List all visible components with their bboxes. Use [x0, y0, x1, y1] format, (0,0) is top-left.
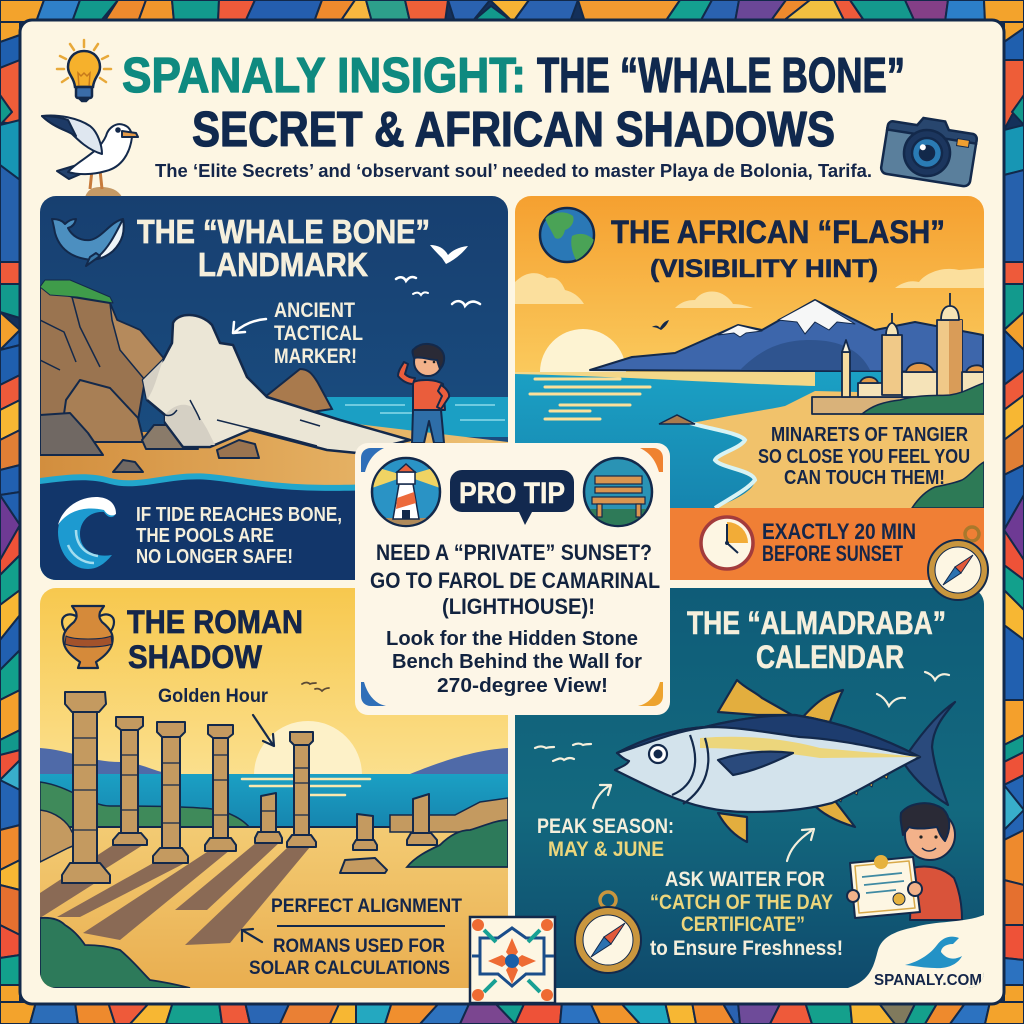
header — [42, 40, 979, 197]
distant hills — [40, 748, 508, 774]
text: peak season — [537, 815, 674, 861]
text: solar calculations: SOLAR CALCULATIONS — [249, 958, 450, 979]
text: perfect alignment: PERFECT ALIGNMENT — [271, 896, 462, 917]
column 2 — [113, 717, 147, 845]
sun — [254, 721, 362, 775]
text: tide warning: NO LONGER SAFE! — [136, 546, 293, 568]
columns — [62, 692, 437, 883]
panel: african flash — [515, 196, 984, 580]
small rock — [659, 415, 695, 424]
icon: camera — [880, 113, 979, 187]
icon: wave — [58, 497, 116, 569]
bone shading — [143, 360, 215, 445]
title: SPANALY INSIGHT: — [122, 49, 526, 103]
callout arrow: ancient marker — [233, 319, 266, 333]
small rock behind bone — [265, 369, 332, 415]
divider rule — [277, 925, 445, 927]
foam — [690, 423, 755, 508]
icon: greek vase — [62, 606, 114, 668]
sea — [515, 372, 984, 512]
sun reflection — [530, 379, 650, 419]
icon: lighthouse — [370, 458, 442, 530]
right bank ruins — [40, 798, 508, 862]
panel heading: roman shadow: SHADOW — [128, 639, 263, 675]
text: ask waiter: CERTIFICATE” — [681, 913, 805, 936]
icon: seagull — [42, 115, 138, 197]
panel heading: african flash: (VISIBILITY HINT) — [650, 255, 878, 283]
text: ask waiter: to Ensure Freshness! — [650, 937, 843, 960]
text: private sunset — [370, 540, 660, 619]
border: bottom strip — [0, 1002, 1024, 1024]
column 1 — [62, 692, 110, 883]
callout arrow: ask waiter — [787, 829, 814, 861]
tuna body — [615, 715, 920, 812]
text: 20 minutes — [762, 519, 916, 566]
column 3 — [153, 722, 188, 863]
text: minarets of tangier — [758, 424, 970, 489]
icon: large gull — [430, 245, 468, 264]
panel: roman shadow — [40, 588, 508, 988]
panel: almadraba calendar — [515, 588, 984, 989]
green headland — [40, 782, 250, 828]
border: right strip — [1004, 22, 1024, 1002]
text: 20 minutes: EXACTLY 20 MIN — [762, 519, 916, 544]
sun glitter — [242, 779, 370, 795]
text: peak season: PEAK SEASON: — [537, 815, 674, 838]
panel heading: almadraba: CALENDAR — [756, 639, 904, 675]
text: stone bench — [386, 627, 642, 697]
sand — [40, 827, 508, 988]
panel heading: whale bone: LANDMARK — [198, 246, 368, 283]
birds — [535, 672, 949, 761]
icon: globe — [540, 208, 594, 262]
pro tip badge — [450, 470, 574, 525]
pro tip badge: PRO TIP — [459, 477, 565, 510]
tangier city — [812, 293, 984, 414]
tuna eye — [649, 745, 667, 763]
text: minarets of tangier: CAN TOUCH THEM! — [784, 467, 945, 489]
text: tide warning: IF TIDE REACHES BONE, — [136, 504, 342, 526]
sun — [540, 329, 626, 372]
tuna finlets — [835, 725, 890, 802]
column shadows — [40, 842, 310, 945]
text: ancient tactical marker: MARKER! — [274, 345, 357, 368]
title: THE “WHALE BONE” — [537, 49, 905, 103]
text: spanaly.com: SPANALY.COM — [874, 972, 982, 989]
person looking out — [398, 344, 449, 443]
callout arrow: to shadow — [242, 929, 262, 942]
text: stone bench: Bench Behind the Wall for — [392, 650, 642, 673]
text: tide warning — [136, 507, 341, 563]
text: private sunset: GO TO FAROL DE CAMARINAL — [370, 568, 660, 593]
panel heading: almadraba: THE “ALMADRABA” — [687, 605, 946, 641]
tuna pectoral fin — [718, 752, 793, 775]
panel heading: whale bone: THE “WHALE BONE” — [137, 213, 430, 250]
column 4 — [205, 725, 236, 851]
sea — [300, 397, 508, 437]
tuna gill — [672, 735, 708, 804]
tuna stripe — [700, 737, 920, 758]
text: ask waiter — [650, 868, 843, 960]
mountains — [590, 300, 983, 372]
decorative tile — [470, 917, 555, 1003]
text: minarets of tangier: MINARETS OF TANGIER — [771, 424, 968, 446]
whale bone — [143, 315, 410, 453]
tuna fish — [615, 680, 955, 842]
border: top strip — [0, 0, 1024, 22]
panel background — [40, 588, 508, 788]
icon: clock — [701, 517, 753, 569]
cliff — [40, 280, 259, 472]
callout arrow: to sun — [253, 715, 274, 746]
panel: pro tip callout — [355, 443, 670, 715]
compass upper overlay — [928, 527, 988, 600]
clouds — [515, 268, 984, 308]
bone details — [165, 400, 320, 446]
logo corner — [848, 915, 984, 988]
text: ask waiter: ASK WAITER FOR — [665, 868, 825, 891]
panel heading: almadraba — [687, 605, 946, 675]
text: solar calculations: ROMANS USED FOR — [273, 936, 445, 957]
corner accents — [361, 448, 663, 706]
column 8 broken — [407, 794, 437, 845]
title — [122, 49, 905, 157]
green bushes — [40, 820, 508, 988]
panel heading: african flash: THE AFRICAN “FLASH” — [611, 214, 945, 250]
panel background — [515, 196, 984, 396]
column 5 broken — [255, 793, 282, 843]
compass bottom — [575, 892, 641, 973]
text: 20 minutes: BEFORE SUNSET — [762, 541, 903, 566]
sea — [40, 774, 508, 829]
text: tide warning: THE POOLS ARE — [136, 525, 274, 547]
green bushes — [862, 383, 984, 508]
text: peak season: MAY & JUNE — [548, 838, 664, 861]
text: ask waiter: “CATCH OF THE DAY — [650, 891, 833, 914]
text: minarets of tangier: SO CLOSE YOU FEEL YOU — [758, 446, 970, 468]
subtitle: The ‘Elite Secrets’ and ‘observant soul’ needed to master Playa de Bolonia, Tarifa. — [155, 160, 872, 181]
text: solar calculations — [249, 936, 450, 979]
wave band — [40, 473, 355, 580]
text: golden hour: Golden Hour — [158, 686, 269, 707]
icon: bench — [580, 458, 656, 529]
panel heading: whale bone — [137, 213, 430, 283]
panel: whale bone landmark — [40, 196, 508, 582]
birds — [302, 682, 329, 691]
title: SECRET & AFRICAN SHADOWS — [192, 103, 835, 157]
tuna back — [617, 715, 920, 757]
text: private sunset: (LIGHTHOUSE)! — [442, 594, 595, 619]
panel heading: roman shadow — [127, 604, 303, 675]
tuna fins — [718, 680, 792, 715]
text: ancient tactical marker — [274, 299, 363, 368]
column 6 — [287, 732, 316, 847]
text: private sunset: NEED A “PRIVATE” SUNSET? — [376, 540, 652, 565]
callout background — [355, 443, 670, 715]
border: left strip — [0, 22, 20, 1002]
shore strip — [515, 372, 815, 386]
panel heading: african flash — [611, 214, 945, 283]
bird — [652, 320, 669, 330]
sand beach — [692, 391, 984, 508]
icon: spanaly wave logo — [905, 937, 962, 968]
fallen slab — [340, 858, 387, 873]
tuna tail — [905, 702, 955, 805]
panel background — [515, 588, 984, 988]
text: stone bench: Look for the Hidden Stone — [386, 627, 638, 650]
icon: seagulls — [396, 277, 480, 306]
column 7 broken — [353, 814, 377, 850]
icon: light bulb — [57, 40, 111, 101]
boy with certificate — [847, 803, 962, 920]
text: stone bench: 270-degree View! — [437, 674, 608, 697]
text: ancient tactical marker: ANCIENT — [274, 299, 355, 322]
icon: whale — [52, 219, 124, 266]
callout arrow: peak season — [593, 785, 611, 808]
certificate — [850, 857, 920, 918]
panel background — [40, 196, 508, 580]
text: ancient tactical marker: TACTICAL — [274, 322, 363, 345]
panel heading: roman shadow: THE ROMAN — [127, 604, 303, 640]
sand — [40, 422, 508, 487]
orange time band — [515, 508, 984, 580]
